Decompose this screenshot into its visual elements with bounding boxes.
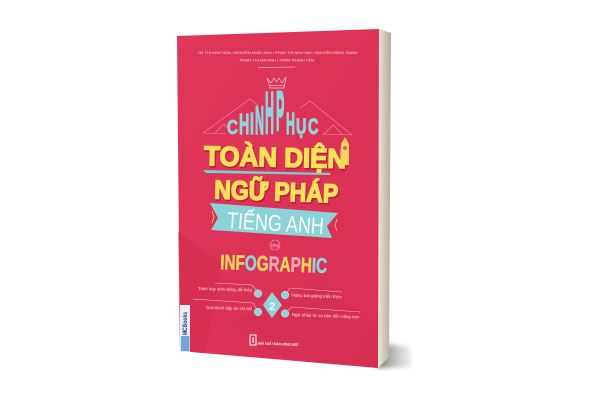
authors: HÀ THỊ NHƯ HOA • NGUYỄN NHẤT ANH • PHAN THỊ NHƯ MAI • NGUYỄN BĂNG GIANG	[198, 50, 358, 55]
authors: PHẠM THỊ MAI ANH • TRẦN THANH TÂM	[240, 58, 314, 62]
heading: chinh phục: I	[250, 107, 254, 142]
feature text: right	[291, 293, 360, 319]
feature text: left: Giải thích đáp án chi tiết	[206, 305, 253, 311]
feature text: right: Video bài giảng kiến thức	[291, 293, 343, 299]
heading: ngữ pháp: NGỮ PHÁP	[214, 174, 339, 209]
publisher logo: NHÀ XUẤT BẢN HỒNG ĐỨC	[257, 341, 299, 347]
heading: chinh phục: P	[276, 79, 284, 142]
heading: infographic: INFOGRAPHIC	[220, 251, 328, 278]
badge: bằng	[270, 240, 280, 250]
heading: chinh phục: C	[308, 114, 318, 139]
drop shadow	[376, 344, 412, 368]
heading: toàn diện: TOÀN DIỆN	[204, 140, 346, 174]
icon: crown	[267, 77, 286, 88]
barcode strip: mcbooks	[180, 305, 190, 352]
banner: tiếng anh	[210, 203, 338, 239]
heading: chinh phục: H	[239, 109, 249, 140]
feature text: left	[198, 286, 253, 311]
connector lines	[193, 283, 360, 313]
page block	[378, 29, 391, 368]
volume diamond: 2	[269, 301, 275, 313]
feature text: right: Ngữ pháp từ cơ bản đến nâng cao	[292, 312, 360, 319]
heading: chinh phục	[227, 79, 318, 145]
authors	[198, 50, 358, 68]
roof line decoration	[203, 99, 352, 135]
publisher logo	[250, 335, 299, 347]
heading: chinh phục: C	[227, 116, 238, 139]
heading: toàn diện: TOÀN DIỆN	[205, 142, 348, 175]
badge: bằng: bằng	[271, 242, 279, 248]
banner: tiếng anh: TIẾNG ANH	[226, 206, 325, 239]
feature bullets	[254, 290, 289, 317]
barcode strip: mcbooks: MCBooks	[183, 311, 189, 335]
book cover	[177, 29, 379, 368]
heading: chinh phục: H	[265, 80, 274, 145]
feature text: left: Trình bày sinh động, dễ hiểu	[198, 286, 253, 292]
heading: ngữ pháp: NGỮ PHÁP	[215, 176, 340, 210]
heading: chinh phục: H	[286, 108, 295, 142]
teal ribbon	[203, 170, 330, 175]
icon: clock tower	[341, 137, 349, 165]
heading: chinh phục: N	[255, 99, 264, 143]
volume diamond	[263, 292, 282, 318]
heading: chinh phục: Ụ	[296, 114, 306, 139]
